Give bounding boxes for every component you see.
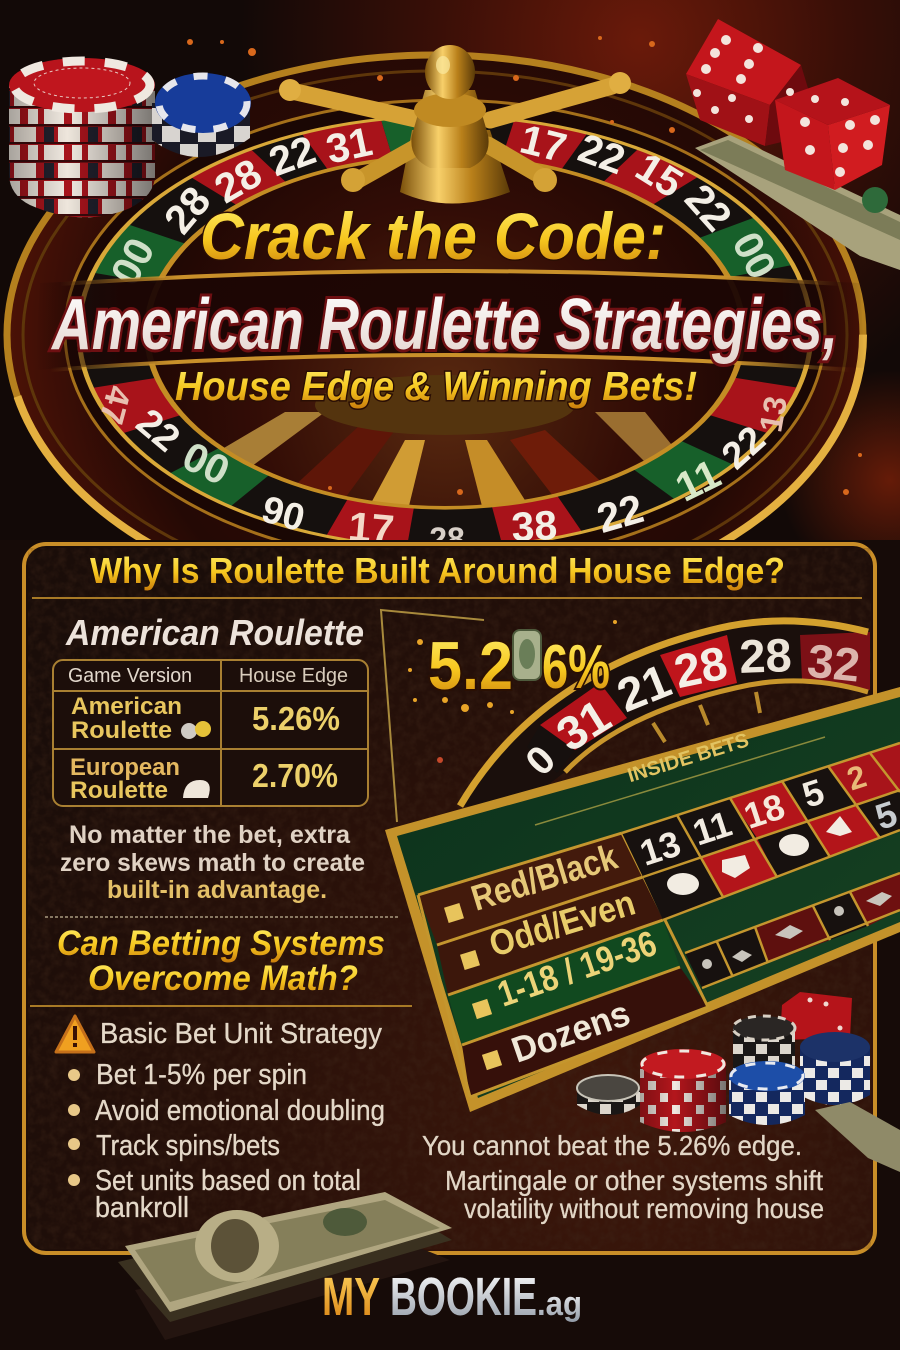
wheel numbers: 17 (516, 116, 571, 171)
dozens row (685, 873, 900, 988)
inside bets label: INSIDE BETS (625, 729, 752, 787)
number grid: 18 (739, 785, 790, 837)
section heading (57, 924, 385, 998)
title: Crack the Code: (200, 199, 666, 273)
strategy list: Set units based on total (95, 1165, 361, 1197)
wheel numbers: 17 (346, 503, 396, 553)
icon: red dice (686, 19, 890, 190)
outside bet rows: Dozens (506, 992, 635, 1071)
comparison table: 5.26% (252, 700, 340, 737)
number grid: 11 (688, 803, 737, 853)
small wheel: 28 (738, 628, 792, 683)
grey chips (577, 1075, 640, 1115)
small wheel: 21 (610, 653, 678, 722)
table heading: American Roulette (65, 612, 364, 653)
strategy list: Avoid emotional doubling (95, 1095, 385, 1127)
wheel numbers: 11 (668, 450, 727, 511)
strategy list: Bet 1-5% per spin (96, 1059, 307, 1091)
comparison table: 2.70% (252, 757, 338, 794)
strategy list: Basic Bet Unit Strategy (100, 1018, 382, 1050)
small wheel: 31 (547, 689, 619, 761)
number grid: 2 (843, 758, 871, 797)
photo frame (381, 610, 484, 822)
number grid: 13 (635, 822, 686, 874)
section heading: Can Betting Systems (57, 924, 385, 963)
right explanation text: volatility without removing house (464, 1193, 824, 1224)
sparkles (408, 620, 617, 763)
wheel numbers: 15 (628, 144, 691, 207)
right section: wheel and betting table (381, 610, 900, 1112)
outside bet rows: 1-18 / 19-36 (492, 922, 662, 1015)
title: House Edge & Winning Bets! (175, 363, 697, 409)
strategy list (68, 1018, 385, 1224)
sparks around the wheel (187, 36, 862, 495)
explanation text (60, 821, 365, 904)
panel heading: Why Is Roulette Built Around House Edge? (90, 550, 785, 591)
wheel outer rim (7, 55, 863, 615)
red chips (640, 1049, 726, 1132)
left section: betting systems (30, 924, 412, 1224)
black white chips (733, 1016, 795, 1085)
section heading: Overcome Math? (88, 959, 358, 998)
blue chips (729, 1061, 805, 1125)
icon: red chip stack (9, 58, 155, 217)
wheel numbers: 47 (91, 382, 138, 428)
title (50, 199, 838, 409)
wheel numbers: 22 (714, 418, 774, 478)
icon: blue chip stack (152, 73, 251, 157)
logo: BOOKIE (390, 1267, 537, 1327)
big percentage (428, 628, 610, 704)
big percentage: 5.2 (428, 628, 513, 704)
wheel numbers: 90 (257, 489, 309, 540)
logo: .ag (537, 1285, 582, 1323)
icon: banknote under dice (695, 135, 900, 270)
explanation text: built-in advantage. (107, 876, 327, 904)
comparison table: Roulette (71, 717, 172, 744)
panel texture (28, 548, 871, 1249)
navy chips (800, 1032, 870, 1105)
logo (322, 1267, 582, 1327)
comparison table: American (71, 693, 182, 720)
outside bet rows: Red/Black (466, 835, 623, 919)
wheel numbers: 22 (592, 485, 648, 542)
number grid: 5 (797, 771, 829, 816)
wheel numbers: 28 (155, 178, 220, 242)
comparison table: Roulette (70, 777, 168, 804)
strategy list: Track spins/bets (96, 1130, 280, 1162)
left section: house edge table (53, 612, 368, 904)
icon: right chip and dice pile (577, 992, 900, 1172)
title band (35, 271, 865, 370)
wheel numbers (91, 116, 794, 557)
number grid (622, 742, 900, 920)
outside bet rows (418, 833, 708, 1097)
wheel numbers: 13 (752, 393, 794, 435)
comparison table: European (70, 754, 180, 781)
comparison table: Game Version (68, 665, 192, 687)
banknotes right (815, 1102, 900, 1172)
small wheel (460, 621, 870, 806)
wheel numbers: 22 (128, 401, 187, 460)
explanation text: zero skews math to create (60, 849, 365, 877)
wheel numbers: 00 (723, 224, 785, 286)
number ring segments (79, 116, 811, 548)
right explanation text: You cannot beat the 5.26% edge. (422, 1130, 802, 1161)
icon: banknote roll (513, 630, 541, 680)
small wheel: 32 (805, 634, 862, 692)
wheel numbers: 38 (510, 502, 558, 550)
wheel numbers: 28 (429, 521, 465, 557)
small red die (780, 992, 852, 1040)
wheel numbers: 31 (322, 118, 376, 173)
wheel inner bowl with spokes (145, 154, 745, 510)
roulette wheel hero (7, 55, 863, 615)
big percentage: 6% (542, 633, 610, 702)
icon: cash stack (118, 1192, 452, 1340)
outside bet rows: Odd/Even (484, 882, 640, 965)
icon: warning (56, 1016, 94, 1052)
lower page backdrop (0, 540, 900, 1350)
icon: brass wheel turret (279, 45, 631, 204)
comparison table (53, 660, 368, 806)
betting table (385, 687, 900, 1112)
comparison table: House Edge (239, 665, 348, 687)
right explanation text: Martingale or other systems shift (445, 1165, 823, 1196)
explanation text: No matter the bet, extra (69, 821, 351, 849)
small wheel: 0 (517, 737, 564, 784)
right explanation text (422, 1130, 824, 1224)
wheel numbers: 28 (207, 150, 269, 212)
wheel numbers: 22 (572, 124, 631, 183)
wheel numbers: 22 (676, 175, 741, 240)
strategy list: bankroll (95, 1192, 189, 1224)
wheel numbers: 00 (102, 230, 164, 292)
wheel numbers: 00 (176, 433, 237, 494)
logo: MY (322, 1267, 380, 1327)
wheel numbers: 22 (263, 126, 322, 185)
main panel (24, 544, 875, 1253)
small wheel: 28 (669, 636, 732, 698)
